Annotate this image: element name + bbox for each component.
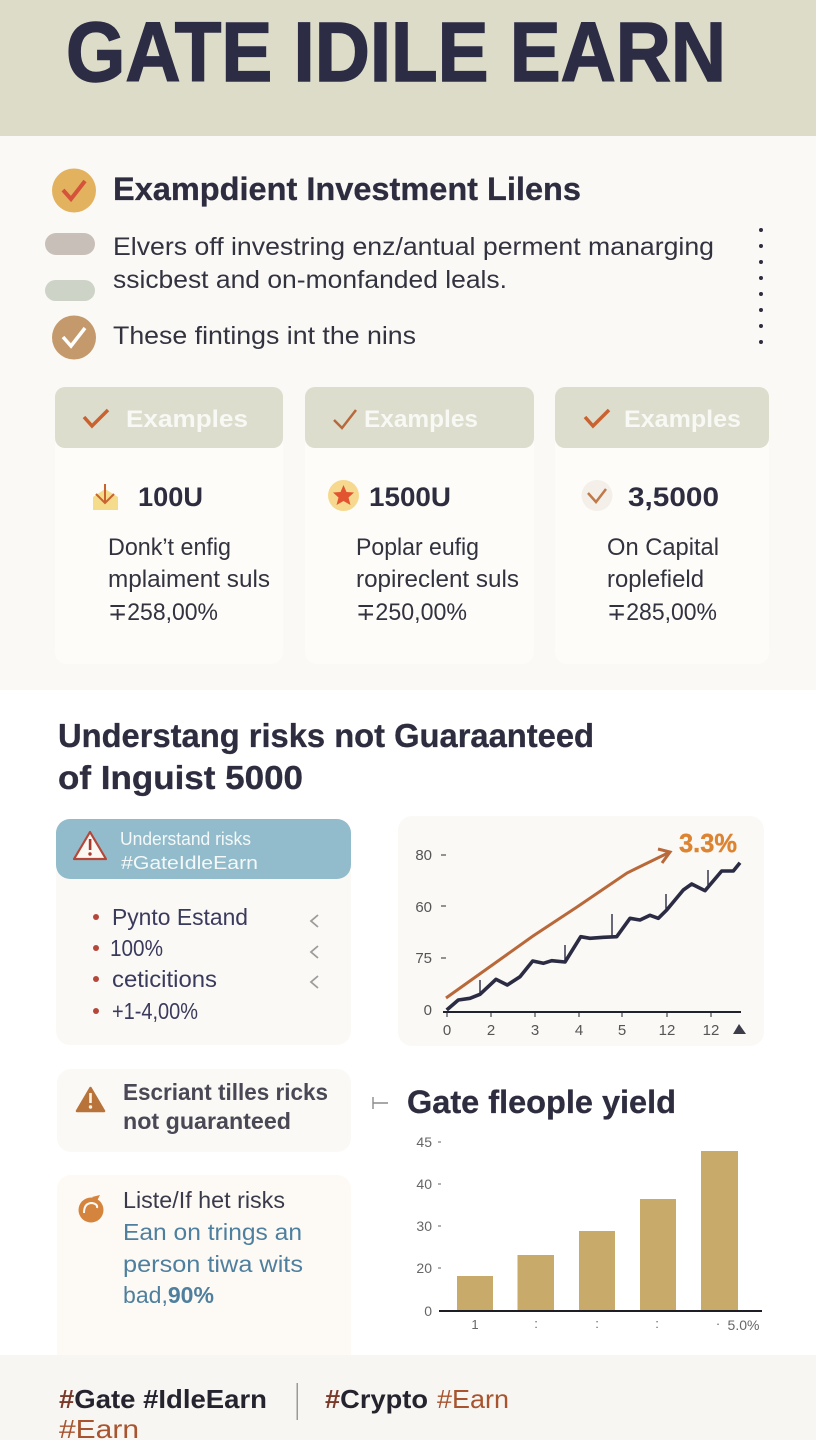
icon: envelope [93,484,118,510]
card text: ∓250,00% [356,599,467,626]
card text: ropireclent suls [356,566,519,593]
section heading: Exampdient Investment Lilens [113,171,581,207]
amount: 1500U [369,482,451,512]
bullet list: +1-4,00% [112,998,198,1024]
x axis labels: : [595,1316,599,1331]
trend arrow [446,849,670,998]
panel: investment intro [45,168,763,360]
y axis labels: 0 [424,1002,432,1019]
findings line: These fintings int the nins [113,322,416,350]
icon: orange check badge [52,168,96,212]
x axis: 3 [531,1022,539,1039]
y axis labels: 80 [415,847,432,864]
blue body text: person tiwa wits [123,1251,303,1277]
bullet list: Pynto Estand [112,904,248,930]
x axis [443,1012,746,1039]
risks heading [58,717,594,796]
icon: tan check badge [52,316,96,360]
card header [305,387,534,448]
x axis [439,1310,762,1312]
panel: understand risks [56,819,351,1045]
card header: Examples [126,406,248,433]
panel: line chart [398,816,764,1046]
chart heading: Gate fleople yield [407,1084,676,1120]
title: GATE IDILE EARN [66,5,726,99]
note text: Escriant tilles ricks [123,1079,328,1105]
x axis: 12 [703,1022,719,1039]
x axis labels: : [655,1316,659,1331]
price line [447,863,740,1010]
card header: Examples [624,406,741,433]
bullet list: 100% [110,935,163,961]
x axis: 2 [487,1022,495,1039]
y axis labels: 60 [415,899,432,916]
panel: example card 3 [555,387,769,664]
panel: risk list [57,1175,351,1370]
risk text: Liste/If het risks [123,1187,285,1213]
dotted side marker [759,228,763,344]
panel header [56,819,351,879]
blue body text: Ean on trings an [123,1219,302,1245]
x axis labels: 1 [471,1317,479,1332]
icon: orange swirl [78,1195,104,1222]
bar chart [416,1134,762,1333]
y axis labels: 30 [416,1218,432,1234]
y axis labels: 20 [416,1260,432,1276]
y axis labels: 0 [424,1303,432,1319]
card text [356,534,519,626]
icon: warning triangle [74,832,106,859]
icon: star badge [328,480,359,511]
connector mark [373,1097,388,1109]
card text: mplaiment suls [108,566,270,593]
icon: warning triangle [77,1088,104,1111]
x axis: 4 [575,1022,583,1039]
panel: risk note [57,1069,351,1152]
intro paragraph: ssicbest and on-monfanded leals. [113,266,507,294]
hashtags: #Gate #IdleEarn [59,1384,267,1414]
icon: check badge [582,480,612,511]
card text: On Capital [607,534,719,561]
header banner [0,0,816,136]
blue body text: bad,90% [123,1282,214,1308]
risks heading: Understang risks not Guaraanteed [58,717,594,754]
intro paragraph [113,233,714,294]
bullet list [93,904,248,1024]
footer [0,1355,816,1440]
earn hashtag: #Earn [437,1384,509,1414]
y axis labels [415,847,432,1019]
x axis labels: : [534,1316,538,1331]
panel header: Understand risks [120,829,251,849]
card header: Examples [364,406,478,433]
card text: Donk’t enfig [108,534,231,561]
divider [296,1383,298,1420]
risks heading: of Inguist 5000 [58,759,303,796]
panel: example card 1 [55,387,283,664]
card text [607,534,719,626]
y axis labels: 40 [416,1176,432,1192]
card text: ∓258,00% [108,599,218,626]
blue body text [123,1219,303,1308]
bullet list: ceticitions [112,966,217,992]
icon: taupe pill [45,233,95,255]
note text [123,1079,328,1134]
note text: not guaranteed [123,1108,291,1134]
card header [55,387,283,448]
bars [457,1151,738,1311]
card text: Poplar eufig [356,534,479,561]
icon: sage pill [45,280,95,301]
x axis labels: · [716,1316,720,1331]
x axis: 5 [618,1022,626,1039]
y axis labels: 75 [415,950,432,967]
intro paragraph: Elvers off investring enz/antual perment manarging [113,233,714,261]
card text [108,534,270,626]
y axis labels: 45 [416,1134,432,1150]
y axis labels [416,1134,432,1319]
x axis: 12 [659,1022,675,1039]
panel header: #GateIdleEarn [121,853,258,873]
card text: ∓285,00% [607,599,717,626]
card header [555,387,769,448]
card text: roplefield [607,566,704,593]
crypto hashtag: #Crypto [325,1384,428,1414]
amount: 100U [138,482,203,512]
chart value: 3.3% [679,828,737,858]
x axis labels: 5.0% [728,1317,759,1333]
chevrons [311,915,318,988]
x axis labels [471,1316,759,1333]
amount: 3,5000 [628,482,719,512]
panel: example card 2 [305,387,534,664]
x axis: 0 [443,1022,451,1039]
